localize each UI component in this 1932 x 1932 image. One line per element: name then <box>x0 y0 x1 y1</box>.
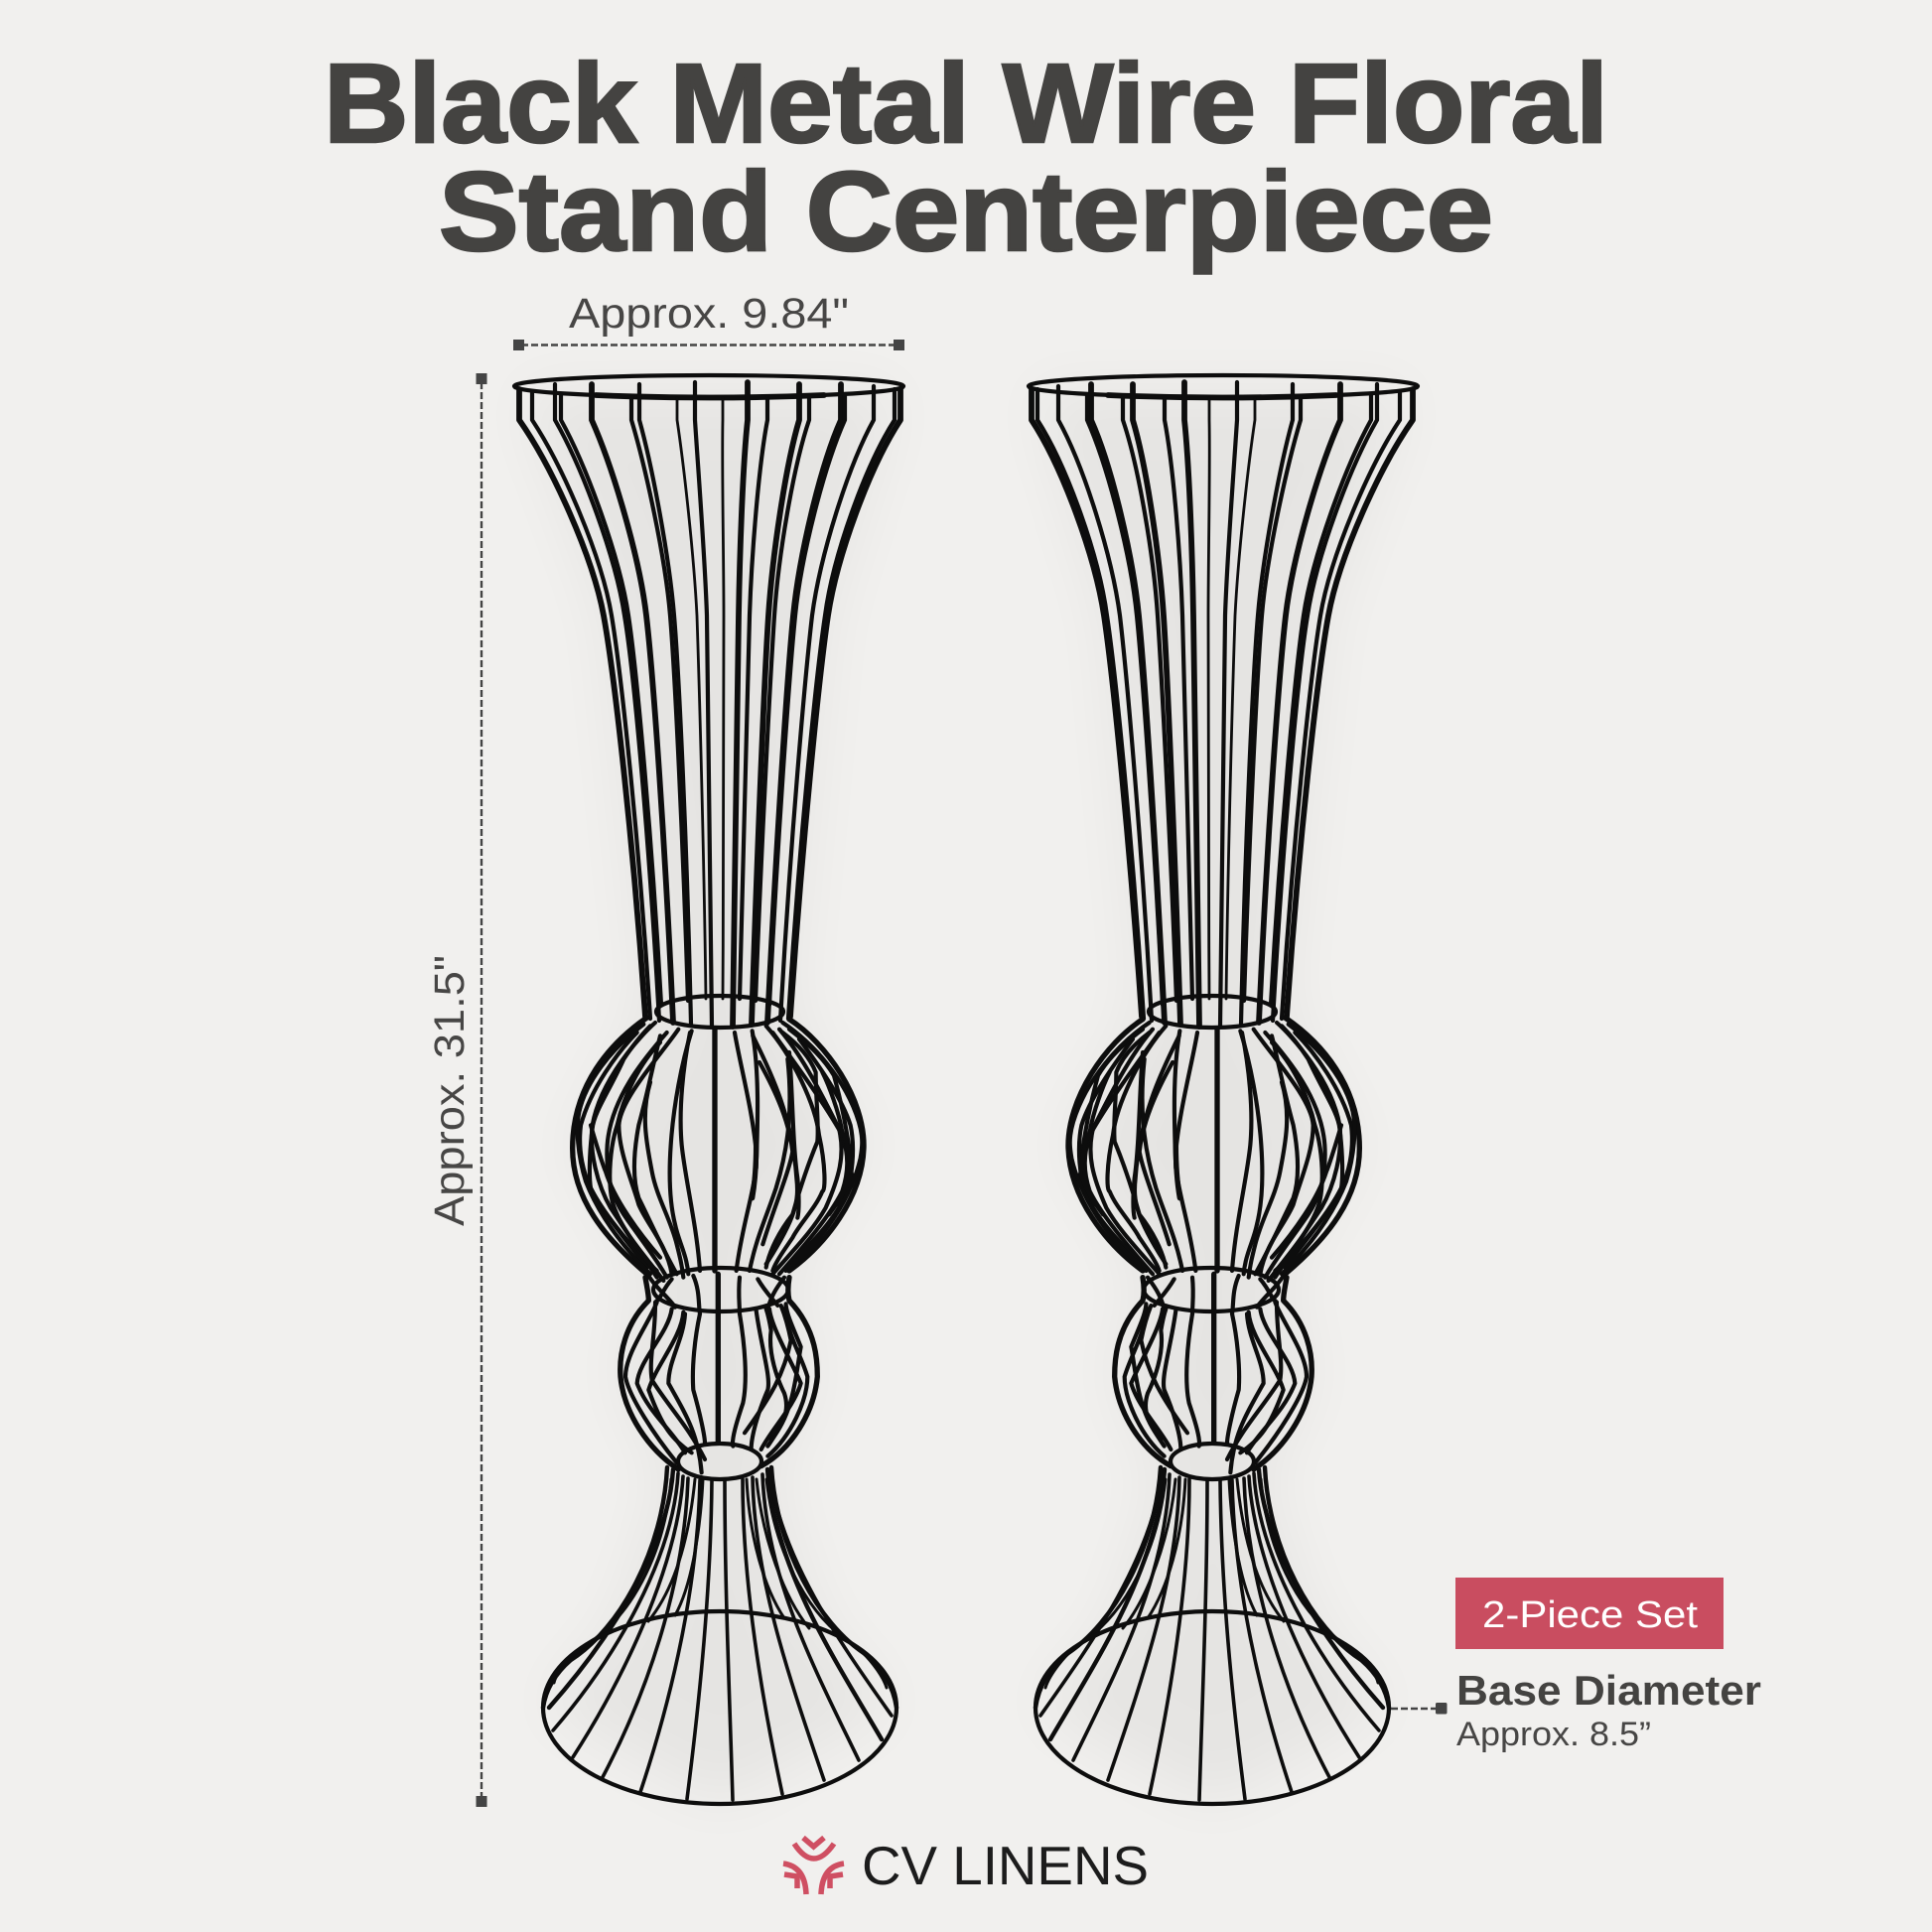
base wires <box>543 1467 897 1800</box>
badge: 2-piece set <box>1455 1578 1724 1649</box>
waist ring <box>653 1268 788 1311</box>
icon: logo mark <box>783 1838 844 1894</box>
large ball outline <box>573 1018 647 1274</box>
width dimension: approx 9.84 inches <box>513 290 904 350</box>
title <box>324 41 1608 274</box>
ring at top of large ball <box>656 996 783 1028</box>
callout: base diameter: Base Diameter <box>1456 1667 1761 1714</box>
small ball wires <box>621 1274 817 1472</box>
width dimension: approx 9.84 inches: Approx. 9.84" <box>569 290 849 338</box>
upper trumpet front wires <box>519 382 900 1027</box>
title: Stand Centerpiece <box>439 149 1493 274</box>
base ellipse <box>543 1611 897 1804</box>
logo: CV Linens <box>783 1835 1149 1896</box>
soft shadow <box>521 389 898 1805</box>
callout: base diameter <box>1391 1667 1761 1753</box>
ring at bottom of small ball <box>678 1444 761 1479</box>
small ball outline <box>621 1278 678 1469</box>
height dimension: approx 31.5 inches: Approx. 31.5" <box>426 955 474 1226</box>
right wire stand <box>1029 375 1418 1805</box>
callout: base diameter: Approx. 8.5” <box>1456 1716 1651 1753</box>
title: Black Metal Wire Floral <box>324 41 1608 166</box>
rim <box>514 375 903 397</box>
wordmark: CV LINENS <box>862 1835 1149 1896</box>
height dimension: approx 31.5 inches <box>426 373 486 1807</box>
upper trumpet back wires <box>561 395 845 1005</box>
left wire stand <box>514 375 903 1805</box>
large ball wires <box>573 1018 864 1281</box>
badge: 2-piece set: 2-Piece Set <box>1482 1594 1698 1636</box>
